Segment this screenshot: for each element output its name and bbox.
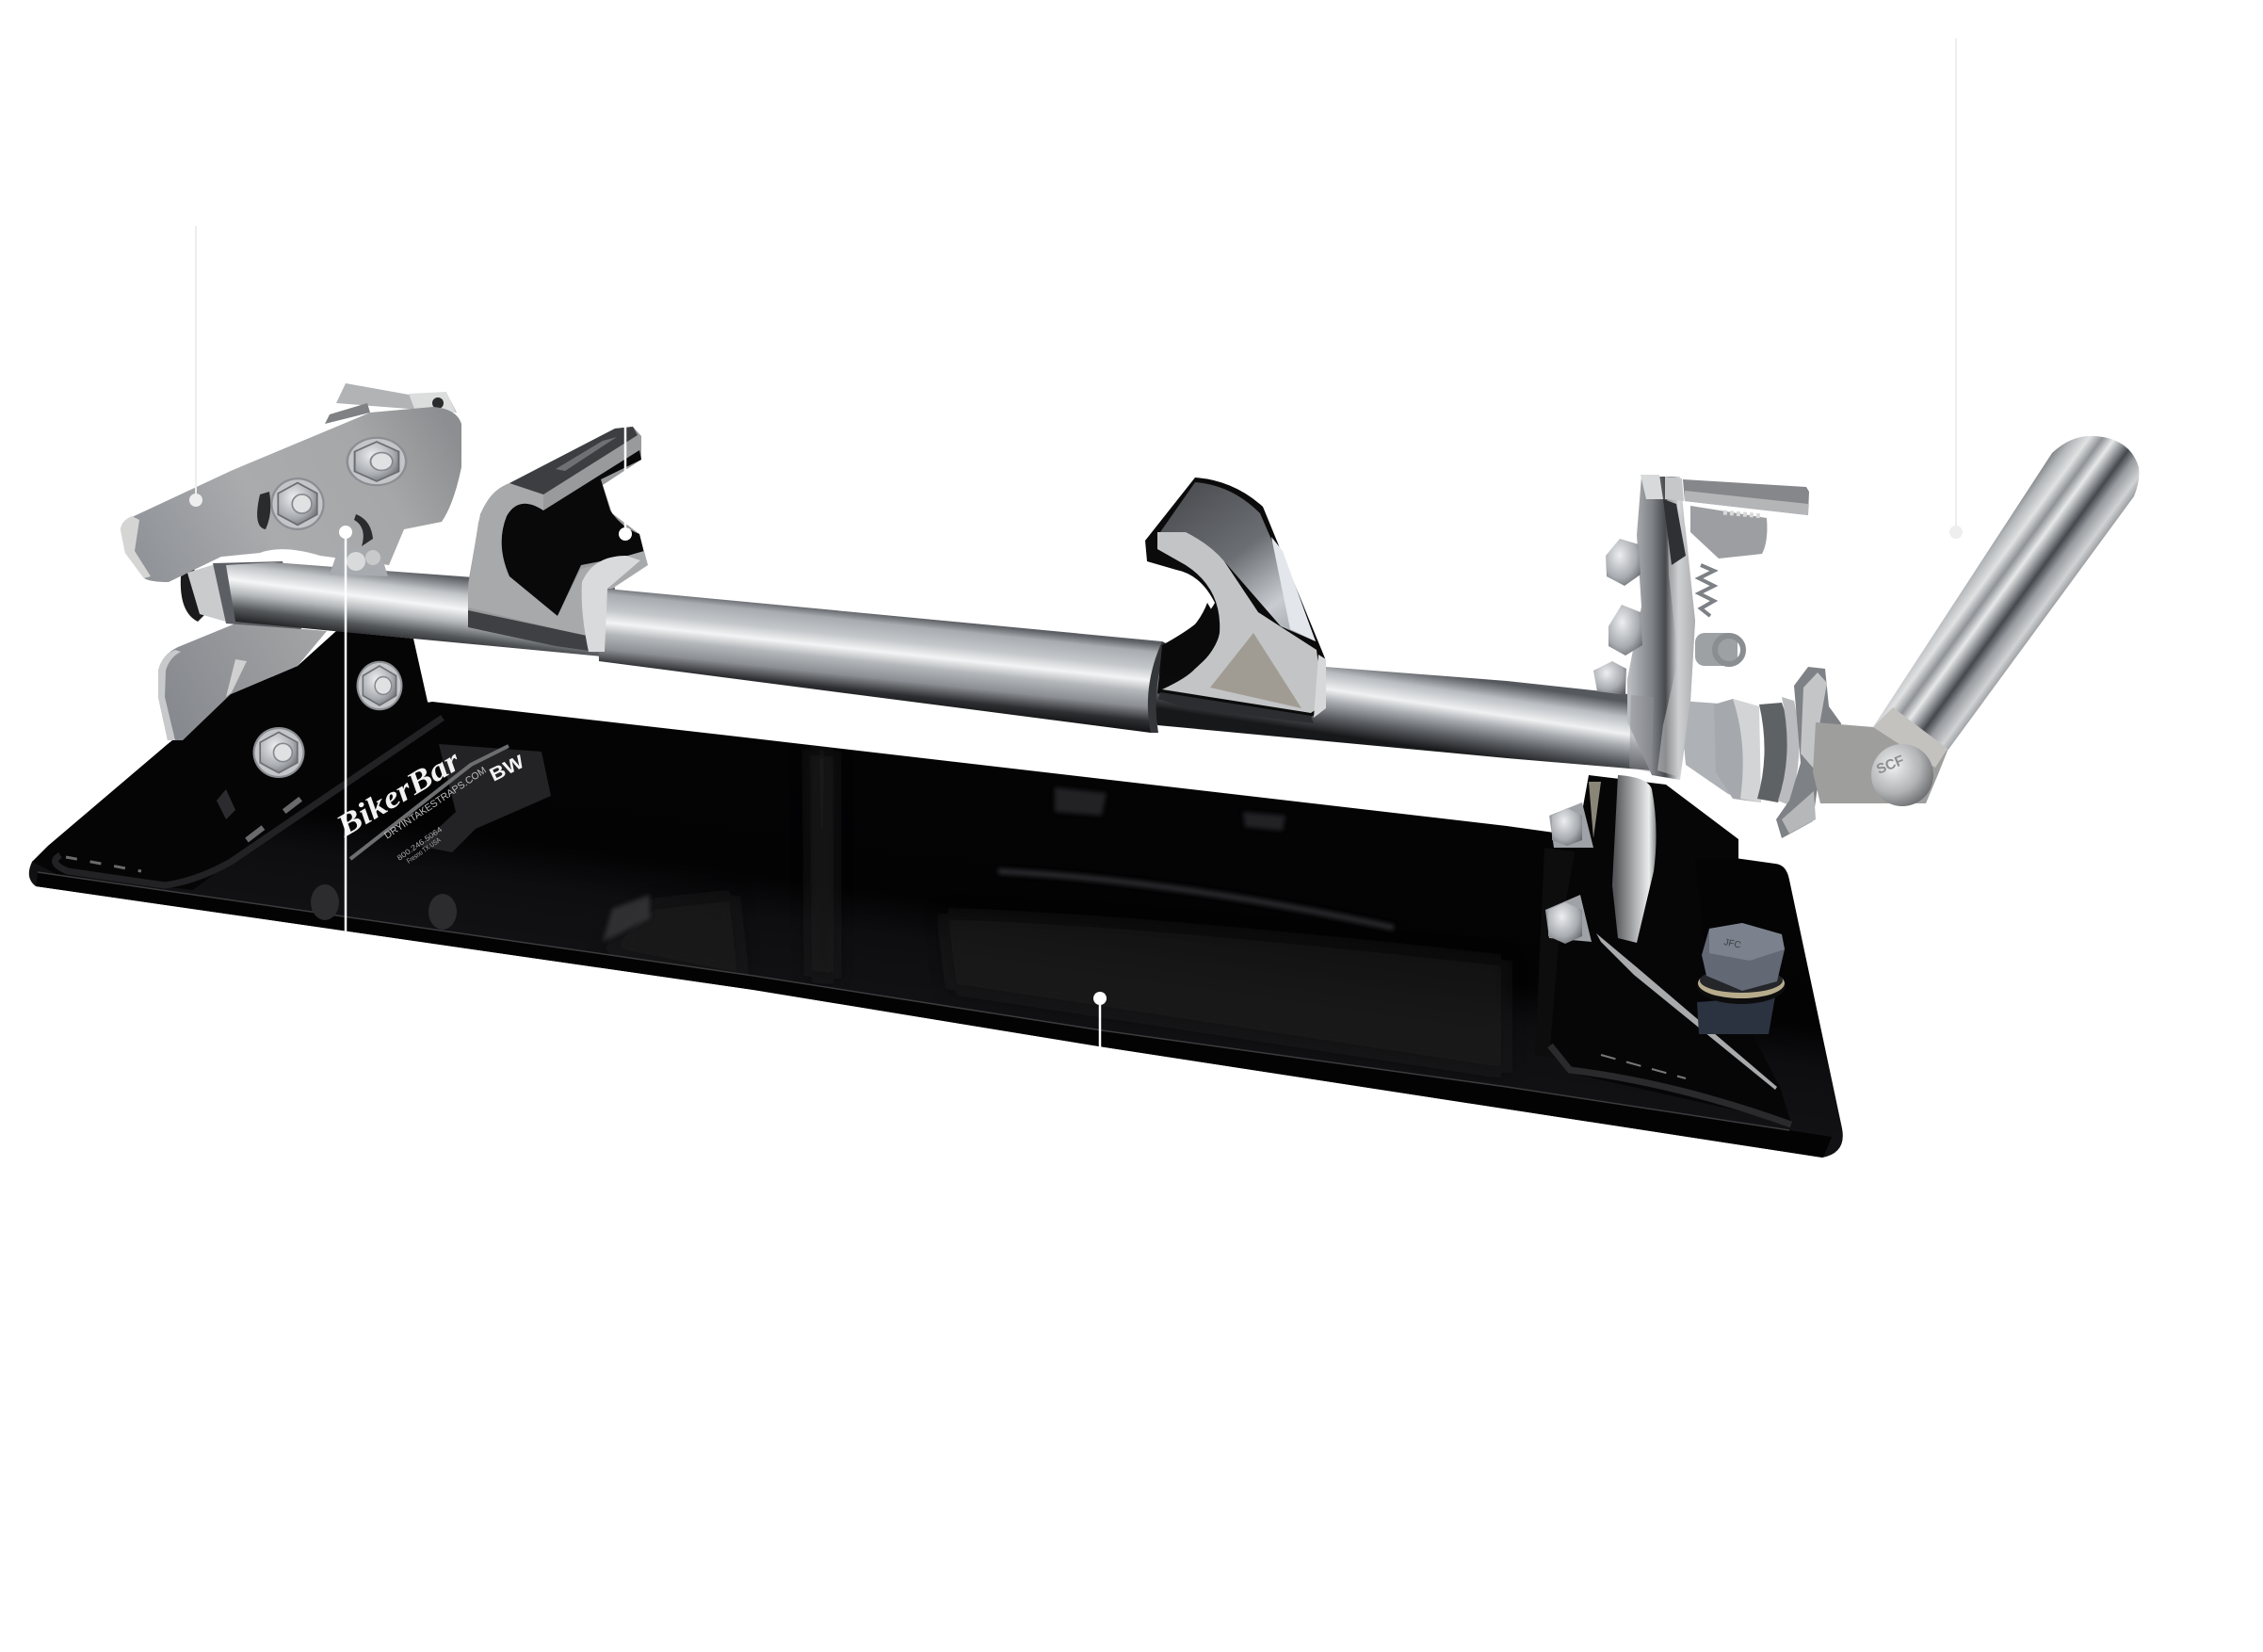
shaft: center thin section: [1140, 655, 1652, 770]
right wheel clamp: [1145, 478, 1326, 723]
callout marker: handle: [1949, 39, 1963, 539]
sticker and logo on plate: [331, 743, 551, 866]
base plate: [29, 702, 1843, 1160]
right lower bracket: [1550, 775, 1791, 1125]
silver face of clamp: [468, 483, 648, 648]
handle: SCF: [1874, 753, 1906, 778]
lower right bolts: [1545, 802, 1593, 944]
left mounting bracket: [32, 631, 457, 930]
callout marker: ratchet plate: [189, 226, 202, 507]
right stub, washers and ratchet wheel: [1680, 667, 1841, 838]
handle: [1813, 436, 2139, 806]
BW mark: BW: [487, 752, 527, 786]
right upper bolts: [1593, 539, 1642, 695]
lower left pivot plate: [158, 624, 327, 740]
ratchet plate: left: [121, 383, 461, 582]
shaft: left section: [226, 562, 615, 657]
brand name: BikerBar: [331, 743, 467, 844]
anchor bolt: [1697, 923, 1786, 1034]
anchor bolt: JFC: [1722, 937, 1742, 951]
callout marker: pivot: [339, 526, 352, 933]
left wheel clamp: [468, 427, 648, 652]
website: DRYINTAKESTRAPS.COM: [382, 765, 489, 841]
origin line: Fresno TX USA: [405, 835, 443, 866]
right ratchet plate and latch: [1627, 475, 1809, 780]
lower left bolts: [252, 661, 403, 778]
phone: 800.246.5064: [396, 825, 445, 863]
callout marker: wheel clamp: [619, 426, 632, 541]
shaft: wide sleeve: [597, 588, 1168, 733]
ratchet bolts: [270, 437, 407, 530]
product illustration: wheel chock assembly: [28, 39, 2140, 1158]
end of shaft left: [181, 561, 301, 629]
callout marker: base plate: [1093, 992, 1107, 1047]
clamp silver band: [1157, 532, 1323, 713]
